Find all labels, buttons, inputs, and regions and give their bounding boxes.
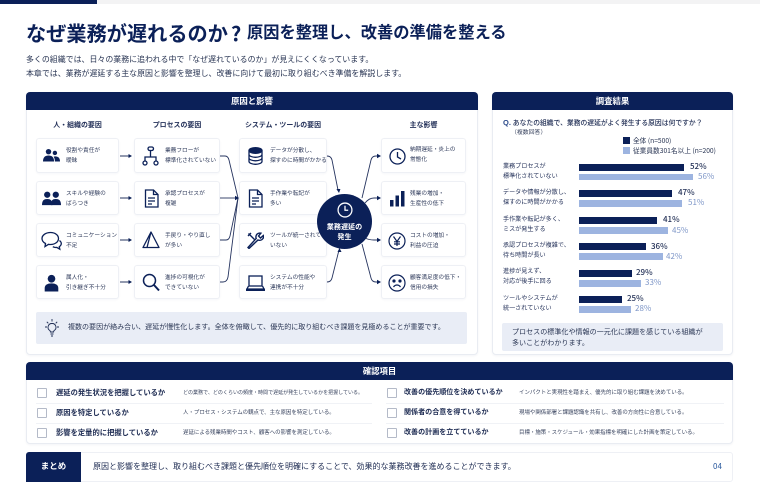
survey note: （複数回答） [511, 130, 546, 136]
top accent bar [0, 0, 760, 4]
card: approvals [134, 181, 220, 215]
card: manual work: 手作業や転記が [270, 191, 310, 197]
card: system performance: 連携が不十分 [270, 285, 304, 291]
bar chart: causes of delay: 51% [688, 197, 704, 208]
card: dispersed data [239, 138, 327, 173]
intro text: 多くの組織では、日々の業務に追われる中で「なぜ遅れているのか」が見えにくくなっています。 [26, 55, 373, 64]
summary bar [26, 452, 733, 482]
intro text: 本章では、業務が遅延する主な原因と影響を整理し、改善に向けて最初に取り組むべき準備を解説します。 [26, 69, 406, 78]
card: satisfaction: 顧客満足度の低下・ [410, 275, 461, 281]
card: cost: 利益の圧迫 [410, 243, 438, 249]
bar chart: causes of delay: 45% [672, 225, 688, 236]
card: skills: ばらつき [66, 201, 89, 207]
checklist right column: 改善の優先順位を決めているか [404, 389, 503, 396]
bar chart: causes of delay: 42% [666, 251, 682, 262]
card: cost: コストの増加・ [410, 233, 450, 239]
bar chart: causes of delay: ツールやシステムが [503, 295, 558, 302]
card: approvals: 複雑 [165, 201, 176, 207]
checklist left column: 影響を定量的に把握しているか [56, 428, 158, 437]
card: overtime [381, 181, 466, 215]
card: communication: コミュニケーション [66, 233, 117, 239]
icon: light bulb [45, 319, 59, 336]
checklist right column [386, 388, 724, 438]
callout: key message: 複数の要因が絡み合い、遅延が慢性化します。全体を俯瞰して、優先的に取り組むべき課題を見極めることが重要です。 [68, 324, 445, 331]
bar chart: causes of delay: 対応が後手に回る [503, 278, 552, 284]
checklist left column: 遅延による残業時間やコスト、顧客への影響を測定している。 [183, 430, 335, 436]
checklist left column: 遅延の発生状況を把握しているか [56, 388, 165, 397]
center circle: delay occurs: 発生 [337, 233, 352, 241]
panel header: survey results [492, 92, 733, 110]
panel: survey results [492, 92, 733, 355]
title: なぜ業務が遅れるのか? [26, 18, 241, 47]
column heading: system: システム・ツールの要因 [245, 122, 321, 129]
icon: document [144, 189, 159, 208]
bar chart: causes of delay: 33% [645, 277, 661, 288]
card: deadlines [381, 138, 466, 173]
card: approvals: 承認プロセスが [165, 191, 205, 197]
bar chart: causes of delay: 56% [698, 171, 714, 182]
card: unclear roles [36, 138, 119, 173]
checklist right column: 関係者の合意を得ているか [404, 409, 489, 416]
card: system performance: システムの性能や [270, 275, 315, 281]
chart legend: 全体 (n=500) [633, 135, 671, 145]
checklist right column: インパクトと実現性を踏まえ、優先的に取り組む課題を決めている。 [519, 390, 688, 396]
card: communication: 不足 [66, 243, 77, 249]
intro text [26, 55, 406, 78]
panel: checklist [26, 362, 733, 444]
card: visibility [134, 265, 220, 299]
bar chart: causes of delay: 手作業や転記が多く、 [503, 216, 564, 223]
title [26, 18, 507, 47]
bar chart: causes of delay: 統一されていない [503, 304, 552, 312]
panel header: causes and impacts: 原因と影響 [231, 96, 273, 106]
card: unclear roles: 曖昧 [66, 158, 77, 164]
card: manual work: 多い [270, 201, 281, 207]
icon: flow chart [142, 146, 159, 166]
summary label [26, 452, 81, 482]
bar chart: causes of delay: 28% [635, 303, 651, 314]
panel header: checklist [26, 362, 733, 380]
card: tools [239, 223, 327, 257]
bar chart: causes of delay: ミスが発生する [503, 226, 546, 232]
icon: laptop [246, 275, 265, 291]
column heading: impact: 主な影響 [410, 122, 437, 129]
card: manual work [239, 181, 327, 215]
checklist left column: 人・プロセス・システムの観点で、主な原因を特定している。 [183, 410, 335, 416]
bar chart: causes of delay: 業務プロセスが [503, 163, 546, 170]
card: satisfaction [381, 265, 466, 299]
card: workflow: 業務フローが [165, 148, 199, 154]
checklist left column: どの業務で、どのくらいの頻度・時間で遅延が発生しているかを把握している。 [183, 390, 363, 396]
bar chart: causes of delay: データや情報が分散し、 [503, 189, 570, 196]
callout: survey takeaway: プロセスの標準化や情報の一元化に課題を感じている組織が [512, 328, 703, 336]
card: satisfaction: 信用の損失 [410, 285, 438, 291]
summary label: まとめ [41, 461, 66, 471]
callout: survey takeaway [502, 323, 723, 351]
checklist right column: 目標・施策・スケジュール・効果指標を明確にした計画を策定している。 [519, 430, 698, 436]
bar chart: causes of delay: 待ち時間が長い [503, 252, 546, 258]
card: siloed work: 属人化・ [66, 275, 89, 281]
icon: sad face [388, 274, 406, 292]
card: overtime: 生産性の低下 [410, 201, 444, 207]
bar chart: causes of delay: 承認プロセスが複雑で、 [503, 242, 570, 249]
icon: bars [390, 191, 404, 206]
panel header: causes and impacts [26, 92, 478, 110]
card: rework: 手戻り・やり直し [165, 233, 210, 239]
icon: yen [388, 232, 406, 250]
icon: speech bubbles [41, 232, 62, 250]
chart legend: 従業員数301名以上 (n=200) [633, 145, 716, 155]
card: deadlines: 納期遅延・炎上の [410, 147, 456, 153]
callout: key message [36, 312, 467, 344]
icon: document [248, 189, 263, 208]
bar chart: causes of delay: 探すのに時間がかかる [503, 198, 564, 206]
icon: clock [337, 202, 353, 218]
center circle: delay occurs: 業務遅延の [327, 223, 362, 231]
icon: magnifier [142, 274, 160, 292]
card: skills [36, 181, 119, 215]
bar chart: causes of delay: 標準化されていない [503, 172, 558, 180]
center circle: delay occurs [317, 194, 372, 248]
bar chart: causes of delay: 52% [690, 161, 707, 172]
checklist left column [36, 388, 372, 438]
card: cost [381, 223, 466, 257]
chart legend [623, 135, 716, 155]
page number: 04 [713, 460, 722, 472]
bar chart: causes of delay: 29% [636, 267, 653, 278]
bar chart: causes of delay: 47% [678, 187, 695, 198]
icon: clock [389, 148, 406, 165]
card: communication [36, 223, 119, 257]
icon: person [44, 274, 58, 292]
card: visibility: 進捗の可視化が [165, 275, 205, 281]
card: dispersed data: データが分散し、 [270, 148, 316, 154]
card: deadlines: 常態化 [410, 157, 427, 163]
checklist right column: 改善の計画を立てているか [404, 429, 489, 436]
bar chart: causes of delay: 25% [627, 293, 644, 304]
panel header: checklist: 確認項目 [363, 366, 396, 376]
bar chart: causes of delay [503, 161, 714, 314]
checklist right column: 現場や関係部署と課題認識を共有し、改善の方向性に合意している。 [519, 410, 687, 416]
card: system performance [239, 265, 327, 299]
card: rework [134, 223, 220, 257]
text: 原因を整理し、改善の準備を整える [247, 24, 507, 42]
icon: people [43, 149, 60, 162]
card: tools: いない [270, 243, 287, 249]
panel header: survey results: 調査結果 [596, 96, 629, 106]
icon: wrench [247, 232, 264, 249]
card: siloed work [36, 265, 119, 299]
card: overtime: 残業の増加・ [410, 191, 444, 197]
column heading: process: プロセスの要因 [153, 122, 201, 129]
card: unclear roles: 役割や責任が [66, 148, 100, 154]
callout: survey takeaway: 多いことがわかります。 [512, 340, 589, 346]
card: workflow [134, 138, 220, 173]
icon: database [248, 147, 263, 165]
summary text: 原因と影響を整理し、取り組むべき課題と優先順位を明確にすることで、効果的な業務改善を進めることができます。 [93, 462, 516, 470]
bar chart: causes of delay: 41% [663, 214, 680, 225]
icon: triangle [142, 231, 160, 248]
card: siloed work: 引き継ぎ不十分 [66, 285, 106, 291]
survey question: Q. あなたの組織で、業務の遅延がよく発生する原因は何ですか？ [503, 118, 703, 127]
bar chart: causes of delay: 36% [651, 241, 668, 252]
card: tools: ツールが統一されて [270, 233, 321, 239]
card: dispersed data: 探すのに時間がかかる [270, 158, 327, 164]
panel: causes and impacts [26, 92, 478, 355]
card: visibility: できていない [165, 285, 199, 291]
checklist left column: 原因を特定しているか [56, 408, 129, 417]
card: rework: が多い [165, 243, 182, 249]
bar chart: causes of delay: 進捗が見えず、 [503, 268, 545, 275]
icon: two people [42, 192, 61, 206]
card: skills: スキルや経験の [66, 191, 106, 197]
card: workflow: 標準化されていない [165, 158, 216, 164]
column heading: people: 人・組織の要因 [53, 122, 102, 129]
